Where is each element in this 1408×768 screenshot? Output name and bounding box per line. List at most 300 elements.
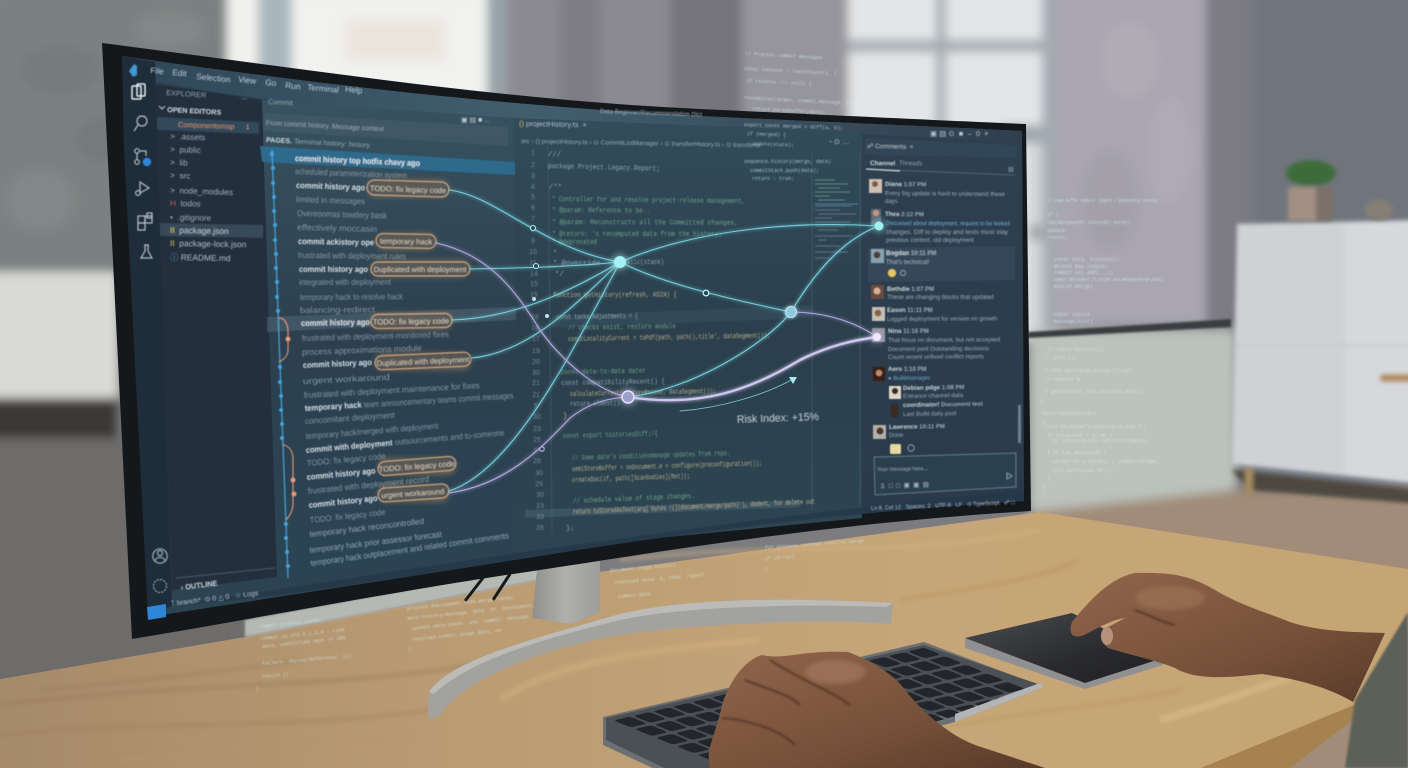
key grid bbox=[615, 648, 1024, 760]
floating code right of monitor: file_extension.of.(); bbox=[1052, 468, 1115, 474]
commit rows: concomitant deployment bbox=[304, 410, 396, 426]
floor bbox=[1030, 490, 1408, 768]
scrollbar bbox=[525, 500, 800, 518]
conversation panel bbox=[862, 134, 1024, 512]
right hand highlight bbox=[1135, 586, 1205, 610]
message bodies: These are changing blocks that updated bbox=[887, 295, 994, 301]
message bodies: changes. Diff to deploy and tests must stay bbox=[886, 230, 1008, 236]
line numbers: 28 bbox=[533, 458, 541, 465]
knuckle highlight bbox=[805, 660, 865, 684]
stand neck bbox=[532, 552, 600, 624]
commit rows: commit history ago bbox=[299, 264, 368, 274]
tag: todo one: TODO: fix legacy code bbox=[370, 184, 446, 195]
cyan links bbox=[449, 190, 879, 491]
active editor row bbox=[157, 117, 259, 134]
message names: Bethdie 1:07 PM bbox=[887, 286, 934, 293]
cabinet bbox=[1232, 220, 1408, 504]
tag: todo one bbox=[367, 180, 449, 197]
tag: todo two bbox=[371, 313, 452, 330]
code lines: * Controller for and resolve project-release management, bbox=[552, 196, 745, 206]
code lines: } bbox=[563, 413, 567, 421]
menu bar: View bbox=[238, 74, 258, 86]
concrete wall bbox=[0, 0, 228, 275]
keyboard top face bbox=[606, 645, 1038, 768]
floating code below monitor: return () bbox=[262, 672, 289, 680]
code lines: }; bbox=[566, 525, 575, 533]
menu bar bbox=[129, 64, 363, 96]
line numbers: 8 bbox=[531, 227, 535, 234]
tag: duplicated one bbox=[371, 260, 470, 277]
line numbers: 1 bbox=[531, 150, 535, 157]
bracket: conflict range one bbox=[279, 318, 290, 362]
panel header: ▤ bbox=[1008, 167, 1014, 173]
commit rows: commit history ago bbox=[308, 493, 378, 510]
commit panel header bbox=[264, 97, 508, 150]
commit panel header: From commit history. Message context bbox=[266, 120, 384, 133]
message names: Lawrence 10:11 PM bbox=[889, 423, 945, 431]
menu bar: Help bbox=[345, 84, 363, 96]
code lines: createDoc(if, path([Scanbodies](Ret)); bbox=[572, 473, 690, 485]
monitor bezel bbox=[102, 43, 1031, 639]
commit rows: temporary hack/merged with deployment bbox=[305, 421, 439, 441]
commit panel header: Terminal history: history bbox=[294, 139, 371, 150]
line numbers: 30 bbox=[536, 492, 544, 499]
right hand bbox=[1070, 573, 1385, 702]
floating code above monitor: return : true; bbox=[752, 176, 794, 182]
commit panel header: PAGES. bbox=[266, 137, 292, 145]
floating code right of monitor: if (... bbox=[1047, 212, 1068, 218]
risk arrow bbox=[680, 377, 797, 411]
message bodies: Last Build daily pool bbox=[903, 411, 956, 418]
floating code right of monitor: cursor.to.a.data(1) / commit/target, bbox=[1052, 459, 1160, 465]
code lines: function getHistory(refresh, ASIN) { bbox=[553, 292, 677, 300]
commit rows: commit history ago bbox=[296, 180, 365, 192]
bracket: conflict range two bbox=[283, 445, 296, 520]
message names: Diana 1:07 PM bbox=[885, 181, 926, 188]
explorer sidebar bbox=[155, 84, 277, 590]
floating code right of monitor bbox=[1040, 198, 1164, 491]
floating code above monitor: const context = load(history, { bbox=[744, 66, 837, 77]
code lines: * bbox=[553, 250, 557, 258]
menu bar: Edit bbox=[172, 67, 188, 79]
status bar bbox=[148, 490, 1024, 617]
line numbers: 3 bbox=[531, 173, 535, 180]
commit rows: frustrated with deployment-monitored fixes bbox=[302, 329, 449, 343]
message bodies: That's technical! bbox=[886, 260, 929, 266]
message bodies: ● Buildmanager bbox=[888, 376, 930, 382]
desk bbox=[0, 512, 1408, 768]
lower left wall bbox=[0, 438, 250, 688]
code lines: const tasks Adjustments = { bbox=[556, 313, 638, 322]
floating code above monitor: return parseBuffer(data); bbox=[752, 106, 827, 116]
commit rows: outsourcements and to-someone bbox=[394, 427, 505, 447]
explorer tree: > public bbox=[170, 145, 201, 155]
floating code right of monitor: commit.set.add(...); bbox=[1054, 270, 1114, 276]
floating code below monitor: update data-check. and. commit. message. bbox=[412, 613, 532, 632]
commit rows: frustrated with deployment rules bbox=[298, 250, 406, 261]
code lines bbox=[548, 151, 815, 533]
title bar bbox=[122, 56, 1022, 150]
floating code right of monitor: // request 8 bbox=[1044, 377, 1080, 383]
thick risk path bbox=[628, 337, 877, 400]
panel header: ▣ ▤ ⊙ ■ – 0 × bbox=[930, 129, 989, 138]
floating code below monitor: process.deployment.todo.merge.cache, bbox=[407, 595, 515, 612]
activity bar bbox=[122, 56, 172, 617]
message bodies: That focus on document, but not accepted bbox=[888, 337, 1000, 344]
lower wall bbox=[1030, 330, 1235, 520]
commit rows: frustrated with deployment record bbox=[307, 474, 430, 496]
line numbers: 15 bbox=[530, 281, 538, 288]
node: small link bbox=[703, 290, 709, 296]
icon: settings gear bbox=[154, 580, 166, 592]
line numbers: 30 bbox=[532, 370, 540, 377]
floating code above monitor: update(state); bbox=[752, 141, 794, 148]
dependency graph bbox=[436, 190, 884, 493]
cables bbox=[465, 574, 510, 601]
commit rows: commit with deployment bbox=[305, 437, 393, 455]
left window bbox=[227, 0, 512, 120]
explorer tree: ᛉ branch* ⊙ 0 △ 0 ☆ Logs bbox=[170, 589, 259, 608]
line numbers: 33 bbox=[536, 514, 544, 521]
monitor stand bbox=[428, 552, 893, 718]
chat scrollbar bbox=[1018, 405, 1021, 443]
line numbers: 23 bbox=[533, 426, 541, 433]
highlighted row 13 bbox=[267, 307, 516, 332]
plant and pot bbox=[1286, 160, 1336, 221]
commit rows: commit history ago bbox=[303, 357, 372, 370]
message names: Aero 1:10 PM bbox=[888, 366, 927, 373]
floating code above monitor: // Process commit messages bbox=[745, 51, 823, 61]
message names: Debian pdge 1:08 PM bbox=[903, 384, 965, 392]
commit timeline bbox=[270, 150, 296, 578]
menu bar: Selection bbox=[196, 71, 231, 85]
thumbnail bbox=[1101, 627, 1113, 645]
floating code below monitor: | bbox=[408, 646, 411, 652]
tag: urgent workaround: urgent workaround bbox=[381, 487, 445, 500]
line numbers: 23 bbox=[536, 503, 544, 510]
trackpad bbox=[965, 613, 1163, 689]
message bodies: Count recent unfixed conflict reports bbox=[888, 354, 984, 361]
floating code right of monitor: { if (is_executed) { bbox=[1047, 450, 1107, 456]
message bodies: Logged deployment for version on growth bbox=[887, 316, 997, 323]
line numbers: 30 bbox=[533, 414, 541, 421]
explorer tree: • .gitignore bbox=[170, 213, 212, 223]
message names: Nina 11:16 PM bbox=[888, 328, 929, 335]
line numbers: 7 bbox=[531, 216, 535, 223]
floating code below monitor: } bbox=[256, 686, 259, 692]
floating code right of monitor: } bbox=[1047, 477, 1050, 483]
message highlight bbox=[868, 246, 1015, 282]
code lines: */ bbox=[555, 271, 564, 279]
floating code right of monitor: commit.deployment.to.target.and.message(merge.path); bbox=[1054, 277, 1164, 283]
floating code right of monitor: delete Map.create; bbox=[1054, 264, 1108, 270]
commit rows: Overeonmas towdery bask bbox=[297, 208, 388, 221]
explorer tree: > lib bbox=[170, 158, 188, 168]
tag: temporary: temporary hack bbox=[380, 237, 432, 246]
code lines: return oldest() bbox=[570, 400, 620, 409]
commit rows: integrated with deployment bbox=[299, 277, 392, 287]
line numbers: 6 bbox=[531, 205, 535, 212]
floating code right of monitor: // const ignore.merge_status(5.17).list; bbox=[1044, 368, 1132, 374]
floating code above monitor bbox=[744, 51, 867, 182]
window sill bbox=[1028, 319, 1231, 338]
line numbers: 5 bbox=[534, 403, 538, 410]
floating code right of monitor: } bbox=[1042, 485, 1045, 491]
node: chat purple bbox=[873, 333, 881, 341]
commit tag pills bbox=[367, 180, 471, 502]
panel header: Threads bbox=[899, 160, 923, 167]
commit rows: frustrated with deployment maintenance for fixes bbox=[304, 380, 480, 400]
status bar blue square bbox=[147, 604, 166, 620]
message bodies: Document pool Outstanding decisions bbox=[888, 346, 989, 353]
floating code below monitor: if (Error) bbox=[765, 554, 795, 562]
floating code below monitor: resolved-commit.stage.data. ok bbox=[412, 628, 502, 643]
commit rows: temporary hack bbox=[305, 400, 362, 413]
message bodies: previous context, old deployment bbox=[886, 238, 974, 244]
floating code below monitor: commit.process.cache. bbox=[260, 617, 323, 630]
commit rows: commit history ago bbox=[306, 465, 376, 482]
floating code above monitor: commitStack.push(data); bbox=[750, 168, 819, 174]
floating code below monitor: for process.context.resolve.merge bbox=[765, 538, 864, 551]
code lines: // checks exist, restore module bbox=[568, 323, 676, 333]
conversation panel content bbox=[865, 129, 1021, 512]
commit panel header: ▣ ▤ ■ … bbox=[461, 117, 491, 124]
code lines: * @override bbox=[553, 260, 600, 268]
screen bbox=[122, 56, 1024, 620]
tag: urgent workaround bbox=[378, 484, 449, 502]
floating code above monitor: if (merged) { bbox=[747, 131, 786, 138]
line numbers: 9 bbox=[531, 238, 535, 245]
floating code right of monitor: } bbox=[1040, 398, 1043, 404]
message input: ⇫ □ □ ▣ ▣ ▤ bbox=[880, 481, 929, 490]
floating code above monitor: recompute(target, commit.message, index); bbox=[744, 95, 867, 107]
icon: account bbox=[153, 549, 167, 563]
commit rows: temporary hack reconcontrolled bbox=[309, 516, 425, 539]
floating code right of monitor: message(hist) bbox=[1054, 319, 1093, 325]
person's shirt sleeve bbox=[1345, 612, 1408, 768]
floating code below monitor: commit.is.old 0.1.2,6 - <100 bbox=[261, 627, 345, 642]
explorer tree: > .assets bbox=[170, 132, 206, 142]
line numbers: 27 bbox=[533, 448, 541, 455]
emoji reactions bbox=[888, 269, 914, 454]
code lines: calculateCurrent(restoreRecent, DataSegment()); bbox=[570, 388, 716, 399]
small junction nodes bbox=[530, 226, 548, 451]
line numbers: 19 bbox=[532, 348, 540, 355]
line numbers: 16 bbox=[531, 314, 539, 321]
code editor chrome bbox=[519, 108, 860, 534]
commit rows: scheduled parameterization system bbox=[295, 166, 407, 180]
stand foot bbox=[428, 600, 893, 718]
line numbers: 25 bbox=[533, 437, 541, 444]
tag: todo two: TODO: fix legacy code bbox=[373, 316, 449, 327]
commit rows: limited in messages bbox=[296, 194, 365, 206]
message names: coordinator! Document test bbox=[903, 401, 983, 409]
line numbers: 14 bbox=[530, 271, 538, 278]
floating code right of monitor: result; bbox=[1047, 235, 1068, 241]
explorer tree: › OUTLINE bbox=[180, 579, 218, 592]
line numbers: 2 bbox=[531, 162, 535, 169]
code editor chrome: () projectHistory.ts × bbox=[519, 119, 587, 129]
floating code below monitor: failure: deploy/Reference: 1() bbox=[262, 653, 352, 667]
floating code right of monitor: // generate(path, hash.id.history.main[]); bbox=[1044, 389, 1144, 395]
floating code right of monitor: // some buffer module: Simple / dependency service bbox=[1048, 198, 1158, 204]
commit rows: temporary hack prior assessor forecast bbox=[309, 529, 443, 555]
message names: Bogdan 10:11 PM bbox=[886, 250, 936, 257]
commit rows: effectively moccasin bbox=[297, 222, 378, 234]
left hand bbox=[709, 652, 1045, 768]
icon: search bbox=[134, 116, 147, 131]
message input: Your message here... bbox=[877, 466, 928, 473]
menu bar: Terminal bbox=[307, 82, 339, 95]
code lines: * @param: Reference to be.. bbox=[552, 207, 650, 216]
floating code above monitor: export const merged = diff(a, b); bbox=[744, 122, 843, 131]
purple links bbox=[436, 243, 877, 493]
panel header: ☍ Comments × bbox=[867, 143, 914, 151]
floating code above monitor: sequence.history(merge, data) bbox=[744, 159, 831, 165]
tag: temporary bbox=[376, 233, 436, 250]
tag: todo three: TODO: fix legacy code bbox=[378, 459, 455, 474]
explorer tree: OPEN EDITORS bbox=[167, 105, 222, 117]
code lines: const export historiesDiff;/{ bbox=[563, 431, 658, 441]
floating code right of monitor: { bbox=[1042, 421, 1045, 427]
node: purple hub bbox=[622, 391, 634, 403]
line numbers: 5 bbox=[531, 194, 535, 201]
code lines: // Some date's conditionsmanage updates from repo. bbox=[572, 450, 730, 463]
status readout: Ln 8, Col 12 Spaces: 2 UTF-8 LF ⊙ TypeScript ☍ □ bbox=[871, 499, 1015, 512]
code lines: * @return: 's recomputed data from the history; bbox=[552, 231, 722, 239]
desk front edge bbox=[1201, 703, 1372, 768]
explorer tree: 1 bbox=[246, 125, 250, 131]
floating code above monitor: if (status !== null) { bbox=[746, 78, 812, 87]
commit rows: urgent workaround bbox=[303, 372, 390, 386]
commit rows: TODO: fix legacy code bbox=[309, 507, 386, 525]
commit rows: commit history ago bbox=[301, 317, 370, 328]
commit rows: team announcementary teams commit messages bbox=[364, 390, 514, 409]
code lines: package Project.Legacy.Report; bbox=[548, 163, 660, 174]
commit rows: commit ackistory ope bbox=[298, 236, 374, 247]
commit panel header: Commit bbox=[268, 97, 293, 107]
floating code below monitor bbox=[256, 538, 864, 692]
keyboard bbox=[603, 642, 1050, 768]
floating code below monitor: | bbox=[765, 566, 768, 572]
code lines: constLocalityCurrent = toPdf(path, path(),title', dataSegment()); bbox=[568, 332, 770, 344]
tag: duplicated two bbox=[375, 352, 471, 370]
dark counter edge bbox=[0, 398, 118, 440]
floating code right of monitor: update bbox=[1047, 228, 1065, 234]
floating code right of monitor: load(deployHandler, historySet) source(); bbox=[1047, 220, 1132, 226]
commit rows: commit history top hotfix chavy ago bbox=[295, 153, 420, 168]
explorer tree: II package.json bbox=[170, 225, 229, 236]
line numbers: 35 bbox=[536, 525, 544, 532]
icon: files bbox=[132, 84, 145, 99]
code editor chrome: Data Beginner/Recommendation Dict bbox=[600, 108, 703, 119]
explorer tree: ⓘ README.md bbox=[170, 252, 231, 263]
line numbers: 30 bbox=[535, 470, 543, 477]
icon: extensions bbox=[138, 213, 152, 230]
floating code right of monitor: if (response = 4, 0) ) bbox=[1047, 433, 1113, 439]
line numbers: 29 bbox=[535, 481, 543, 488]
message bodies bbox=[885, 191, 1010, 439]
blue-grey wall bbox=[1206, 0, 1408, 510]
line numbers: 17 bbox=[532, 336, 540, 343]
commit rows: temporary hack outplacement and related commit comments bbox=[310, 530, 509, 568]
node: main hub bbox=[614, 256, 626, 268]
code lines: /** bbox=[549, 184, 562, 192]
message bodies: Discussed about deployment, request to be looked bbox=[886, 221, 1010, 227]
message names: Eason 11:11 PM bbox=[887, 307, 933, 314]
floating code below monitor: data-history-message. data. Or. Deployment. bbox=[407, 603, 536, 622]
line numbers: 15 bbox=[530, 292, 538, 299]
message names: Thea 2:12 PM bbox=[885, 211, 924, 218]
code lines: * @param: Reconstructs all the Committed changes, bbox=[552, 219, 738, 228]
code editor chrome: ▫ ⊙ … bbox=[829, 137, 850, 146]
code lines: const data-to-data dater bbox=[561, 368, 646, 377]
right window bbox=[848, 0, 1056, 340]
panel header: Channel bbox=[870, 160, 896, 167]
commit rows: TODO: fix legacy code bbox=[306, 451, 386, 468]
commit rows: temporary hack to resolve hack bbox=[300, 291, 404, 302]
line numbers: 20 bbox=[532, 359, 540, 366]
menu bar: Go bbox=[265, 77, 277, 88]
floating code below monitor: resolved.data. 1, then. report bbox=[615, 572, 705, 586]
icon: flask bbox=[141, 245, 152, 258]
commit rows: process approximations module bbox=[302, 343, 422, 357]
explorer tree bbox=[157, 88, 275, 608]
menu bar: File bbox=[150, 65, 165, 76]
avatars bbox=[869, 179, 901, 439]
line numbers: 4 bbox=[531, 184, 535, 191]
white counter bbox=[0, 272, 118, 399]
explorer tree: ... bbox=[241, 92, 248, 101]
message bodies: Entrance channel data bbox=[903, 393, 964, 400]
code editor chrome: src › () projectHistory.ts › ⊙ CommitListManager › ⊙ transferHistory.ts › ⊙ transferor bbox=[521, 138, 761, 149]
menu bar: Run bbox=[285, 80, 301, 92]
selected file row bbox=[160, 223, 263, 238]
activity bar icons bbox=[132, 84, 167, 592]
finger shadows bbox=[722, 660, 850, 745]
message input bbox=[874, 453, 1016, 495]
message bodies: Done bbox=[889, 433, 904, 439]
risk index label: Risk Index: +15% bbox=[737, 411, 819, 426]
line numbers: 10 bbox=[529, 249, 537, 256]
line numbers: 11 bbox=[529, 260, 537, 267]
screen text layer bbox=[129, 64, 1021, 608]
node: chat cyan bbox=[874, 222, 884, 230]
keyboard front edge bbox=[955, 683, 1044, 722]
floating code right of monitor: try (processing-pool-.path.historySummary) bbox=[1052, 438, 1147, 444]
icon: run and debug bbox=[136, 182, 149, 195]
floating code right of monitor: end(of.merge) bbox=[1054, 284, 1093, 290]
message bodies: days bbox=[885, 199, 898, 205]
panel header bbox=[865, 129, 1017, 175]
line numbers: 21 bbox=[532, 392, 540, 399]
floating code below monitor: commit-data bbox=[618, 591, 651, 600]
floating code right of monitor: const handleData() bbox=[1042, 411, 1096, 417]
floating code below monitor: document.stage.history. bbox=[610, 562, 679, 574]
line numbers: 21 bbox=[532, 380, 540, 387]
code lines: const compatibilityRecent() { bbox=[561, 378, 665, 388]
small ornament bbox=[1365, 200, 1393, 220]
minimap bbox=[815, 180, 858, 258]
curtain bbox=[1056, 0, 1206, 325]
explorer tree: H todos bbox=[170, 199, 201, 209]
floating code right of monitor: const status bbox=[1054, 312, 1090, 318]
floating code right of monitor: // const history(); bbox=[1048, 347, 1105, 353]
tag: duplicated two: Duplicated with deployment bbox=[376, 355, 470, 368]
explorer tree: Componentsmap bbox=[178, 120, 235, 131]
line numbers bbox=[529, 150, 544, 532]
floating code below monitor: data, identified deps <= 100 bbox=[262, 635, 346, 650]
